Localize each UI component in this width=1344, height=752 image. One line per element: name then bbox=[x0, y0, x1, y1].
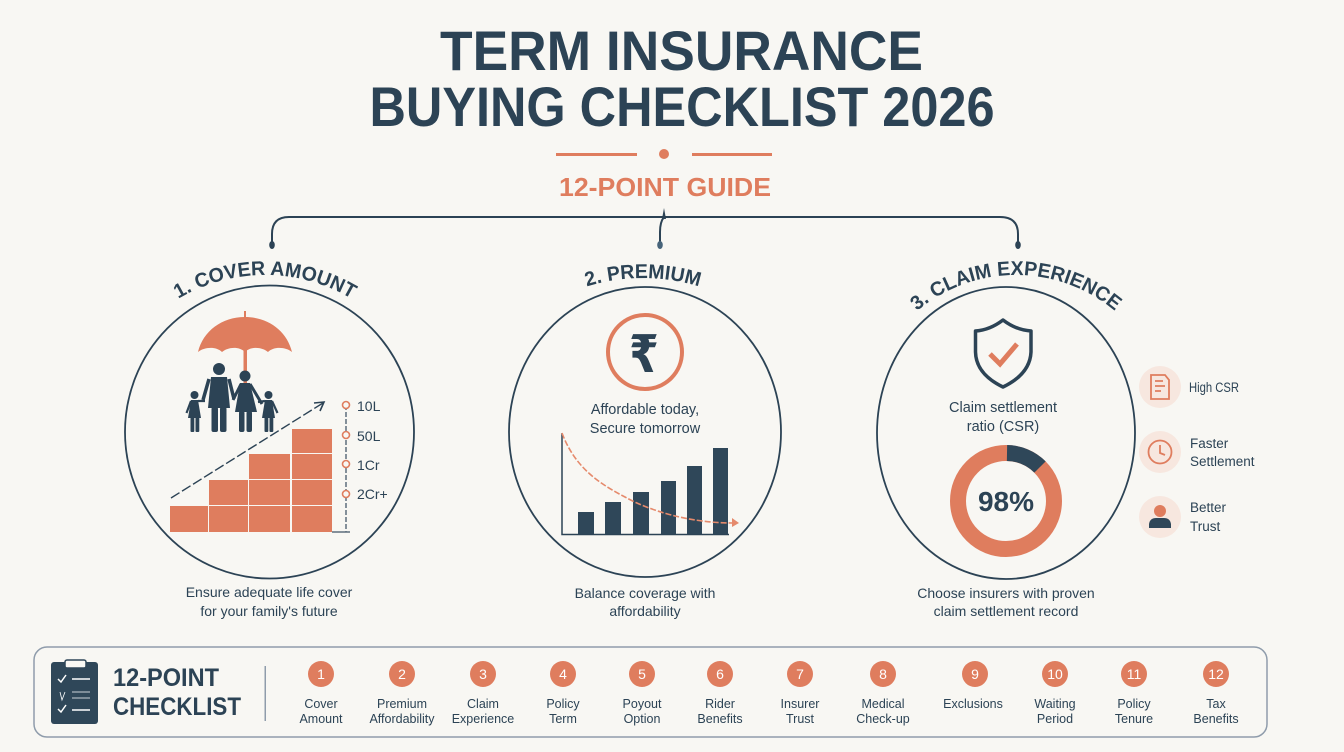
benefit: high csr: High CSR bbox=[1189, 380, 1239, 395]
cover scale bbox=[332, 398, 388, 532]
panel: 12-point checklist bbox=[34, 647, 1267, 737]
item 6: Benefits bbox=[697, 712, 743, 726]
panel: claim experience bbox=[876, 261, 1136, 619]
checklist heading bbox=[113, 664, 241, 721]
item 5: Option bbox=[624, 712, 660, 726]
cover scale: 10L bbox=[357, 398, 381, 414]
item 10: 10 bbox=[1047, 666, 1063, 682]
caption: premium: affordability bbox=[609, 603, 681, 619]
item 8 bbox=[856, 661, 910, 726]
item 7: 7 bbox=[796, 666, 804, 682]
item 11: Tenure bbox=[1115, 712, 1153, 726]
dashed growth arrow bbox=[171, 402, 324, 498]
cover scale: 50L bbox=[357, 428, 381, 444]
item 6: 6 bbox=[716, 666, 724, 682]
item 5: 5 bbox=[638, 666, 646, 682]
caption: cover amount: for your family's future bbox=[200, 603, 338, 619]
caption: claim experience: claim settlement record bbox=[934, 603, 1078, 619]
icon: rupee coin: ₹ bbox=[629, 325, 659, 385]
item 10: Waiting bbox=[1034, 697, 1076, 711]
item 2 bbox=[369, 661, 435, 726]
caption: cover amount: Ensure adequate life cover bbox=[186, 584, 353, 600]
item 1: 1 bbox=[317, 666, 325, 682]
tagline: Secure tomorrow bbox=[590, 421, 701, 437]
bar chart bbox=[562, 433, 739, 534]
caption: claim experience bbox=[917, 585, 1095, 619]
item 5: Poyout bbox=[623, 697, 662, 711]
item 7: Insurer bbox=[781, 697, 819, 711]
tagline: Affordable today, bbox=[591, 402, 699, 418]
benefit: faster settlement bbox=[1139, 431, 1255, 473]
item 9: Exclusions bbox=[943, 697, 1003, 711]
panel outline circle bbox=[509, 287, 781, 577]
caption: cover amount bbox=[186, 584, 353, 619]
donut chart bbox=[958, 453, 1054, 549]
icon: umbrella bbox=[198, 311, 292, 386]
benefit: better trust: Trust bbox=[1190, 519, 1220, 534]
benefit: faster settlement: Settlement bbox=[1190, 454, 1255, 469]
item 7 bbox=[781, 661, 819, 726]
item 4: 4 bbox=[559, 666, 567, 682]
icon: person bbox=[1149, 505, 1171, 528]
item 10 bbox=[1034, 661, 1076, 726]
icon: family bbox=[186, 363, 278, 432]
item 8: 8 bbox=[879, 666, 887, 682]
icon: rupee coin bbox=[608, 315, 682, 389]
panel outline circle bbox=[877, 287, 1135, 579]
item 11: 11 bbox=[1127, 666, 1141, 682]
item 5 bbox=[623, 661, 662, 726]
item 8: Check-up bbox=[856, 712, 910, 726]
caption: claim experience: Choose insurers with proven bbox=[917, 585, 1095, 601]
item 12 bbox=[1193, 661, 1239, 726]
csr label: ratio (CSR) bbox=[967, 419, 1039, 435]
item 2: Premium bbox=[377, 697, 427, 711]
item 6: Rider bbox=[705, 697, 735, 711]
benefit: faster settlement: Faster bbox=[1190, 436, 1229, 451]
item 6 bbox=[697, 661, 743, 726]
connector bracket bbox=[269, 208, 1021, 249]
icon: clock bbox=[1148, 440, 1172, 464]
item 3: 3 bbox=[479, 666, 487, 682]
benefit: high csr bbox=[1139, 366, 1239, 408]
title: BUYING CHECKLIST 2026 bbox=[370, 75, 994, 138]
item 12: 12 bbox=[1208, 666, 1224, 682]
heading: premium: 2. PREMIUM bbox=[584, 264, 702, 286]
title: TERM INSURANCE bbox=[440, 19, 923, 82]
benefit: better trust: Better bbox=[1190, 500, 1227, 515]
declining premium curve bbox=[562, 433, 739, 527]
item 9: 9 bbox=[971, 666, 979, 682]
cover scale: 2Cr+ bbox=[357, 486, 388, 502]
donut chart: 98% bbox=[978, 486, 1034, 517]
item 11: Policy bbox=[1117, 697, 1151, 711]
caption: premium bbox=[575, 585, 715, 619]
stacked bars bbox=[170, 429, 332, 532]
item 2: Affordability bbox=[369, 712, 435, 726]
panel: cover amount bbox=[124, 261, 415, 619]
item 3: Claim bbox=[467, 697, 499, 711]
item 4: Policy bbox=[546, 697, 580, 711]
item 1: Amount bbox=[299, 712, 343, 726]
checklist heading: CHECKLIST bbox=[113, 693, 241, 721]
csr label bbox=[949, 400, 1057, 435]
item 3: Experience bbox=[452, 712, 514, 726]
panel: premium bbox=[508, 264, 782, 619]
item 2: 2 bbox=[398, 666, 406, 682]
title bbox=[370, 19, 994, 138]
item 1 bbox=[299, 661, 343, 726]
caption: premium: Balance coverage with bbox=[575, 585, 715, 601]
item 12: Benefits bbox=[1193, 712, 1239, 726]
subtitle: 12-POINT GUIDE bbox=[559, 172, 771, 202]
title divider ornament bbox=[556, 149, 772, 159]
item 1: Cover bbox=[304, 697, 338, 711]
heading: claim experience: 3. CLAIM EXPERIENCE bbox=[910, 261, 1122, 310]
item 12: Tax bbox=[1206, 697, 1226, 711]
icon: document bbox=[1151, 375, 1169, 399]
cover scale: 1Cr bbox=[357, 457, 380, 473]
item 3 bbox=[452, 661, 514, 726]
item 7: Trust bbox=[786, 712, 815, 726]
csr label: Claim settlement bbox=[949, 400, 1057, 416]
tagline bbox=[590, 402, 701, 437]
item 8: Medical bbox=[861, 697, 905, 711]
item 4: Term bbox=[549, 712, 577, 726]
icon: shield check bbox=[976, 320, 1031, 387]
heading: cover amount: 1. COVER AMOUNT bbox=[174, 261, 358, 298]
panel outline circle bbox=[125, 286, 414, 578]
item 4 bbox=[546, 661, 580, 726]
item 10: Period bbox=[1037, 712, 1073, 726]
benefit: better trust bbox=[1139, 496, 1227, 538]
checklist heading: 12-POINT bbox=[113, 664, 219, 692]
item 11 bbox=[1115, 661, 1153, 726]
item 9 bbox=[943, 661, 1003, 711]
icon: clipboard bbox=[51, 660, 98, 724]
